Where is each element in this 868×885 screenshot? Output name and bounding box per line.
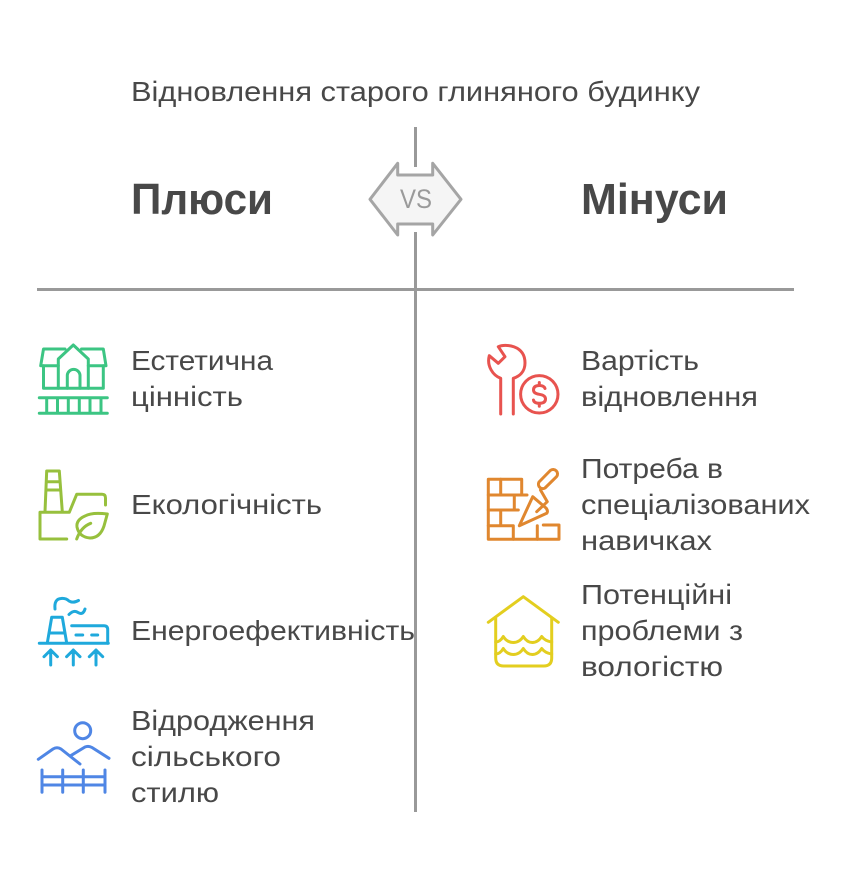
text: need for specialised skills: навичках [581, 525, 712, 556]
text: rural style revival: стилю [131, 777, 219, 808]
text: potential moisture problems: проблеми з [581, 615, 743, 646]
text: potential moisture problems [581, 579, 743, 682]
text: restoration cost: відновлення [581, 381, 758, 412]
text: aesthetic value [131, 345, 273, 412]
heading: cons: Мінуси [581, 175, 728, 224]
text: rural style revival: Відродження [131, 705, 315, 736]
text: potential moisture problems: Потенційні [581, 579, 732, 610]
text: need for specialised skills: Потреба в [581, 453, 723, 484]
title: Відновлення старого глиняного будинку [131, 76, 700, 107]
text: aesthetic value: Естетична [131, 345, 273, 376]
divider lines [37, 127, 794, 812]
text: energy efficiency: Енергоефективність [131, 615, 415, 646]
vs badge [370, 163, 461, 235]
heading: pros: Плюси [131, 175, 273, 224]
icon: wrench and coin [489, 345, 558, 414]
text: potential moisture problems: вологістю [581, 651, 723, 682]
text: rural style revival [131, 705, 315, 808]
text: aesthetic value: цінність [131, 381, 243, 412]
icon: hills, sun and fence [38, 723, 109, 792]
icon: brick wall and trowel [488, 469, 559, 539]
vs badge: VS [400, 184, 432, 214]
icon: house with fence [39, 345, 107, 413]
text: eco-friendliness: Екологічність [131, 489, 322, 520]
text: restoration cost [581, 345, 758, 412]
text: need for specialised skills [581, 453, 810, 556]
text: restoration cost: Вартість [581, 345, 699, 376]
icon: flooded house [488, 597, 558, 666]
text: rural style revival: сільського [131, 741, 281, 772]
icon: factory with leaf [40, 471, 107, 539]
icon: energy plant with arrows [39, 598, 108, 665]
text: need for specialised skills: спеціалізованих [581, 489, 810, 520]
